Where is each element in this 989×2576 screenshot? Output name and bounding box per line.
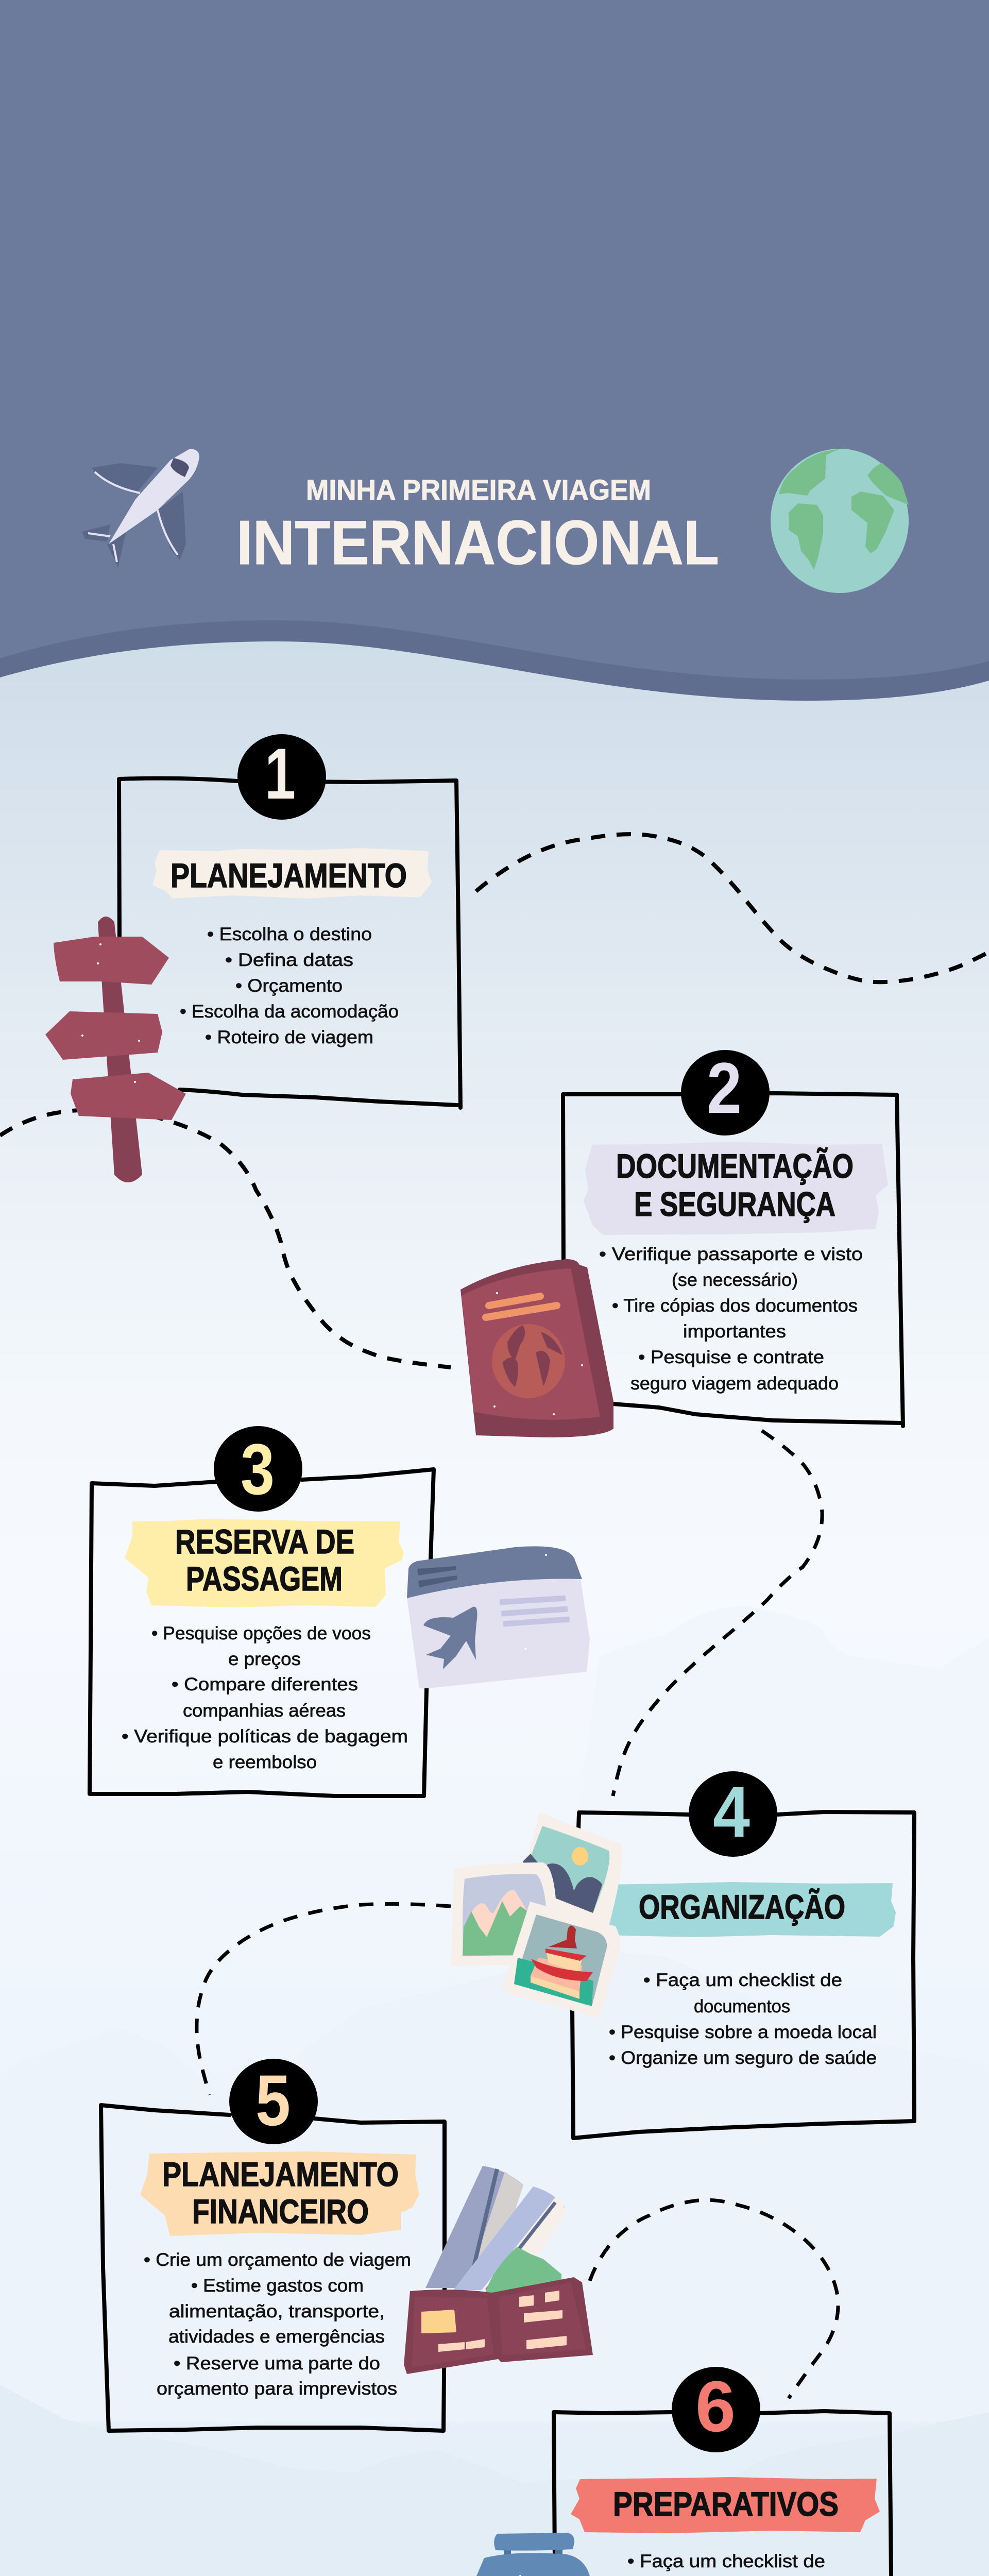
card outline xyxy=(119,778,461,1108)
list: • Tire cópias dos documentos xyxy=(612,1296,858,1316)
icon: airplane xyxy=(82,449,199,568)
card outline xyxy=(101,2105,445,2431)
icon: boarding pass xyxy=(407,1546,590,1688)
panel: step 3 reserva de passagem xyxy=(90,1426,590,1796)
list: e preços xyxy=(228,1649,301,1669)
heading: ORGANIZAÇÃO xyxy=(639,1888,845,1926)
heading highlight xyxy=(584,1142,888,1235)
list xyxy=(599,1244,863,1394)
sky background with mountains xyxy=(0,641,989,2576)
number badge xyxy=(214,1426,302,1512)
list: • Verifique políticas de bagagem xyxy=(122,1726,408,1747)
tickets xyxy=(425,2166,565,2290)
number badge: 2 xyxy=(707,1047,742,1128)
panel: step 4 organizacao xyxy=(451,1771,914,2138)
title: INTERNACIONAL xyxy=(236,507,719,578)
number badge: 3 xyxy=(241,1429,275,1510)
list xyxy=(180,924,399,1047)
panel: step 1 planejamento xyxy=(45,733,461,1182)
heading highlight xyxy=(125,1519,404,1607)
number badge xyxy=(672,2366,760,2452)
wallet xyxy=(404,2277,593,2374)
money xyxy=(486,2247,561,2303)
list: atividades e emergências xyxy=(168,2327,385,2347)
heading: PREPARATIVOS xyxy=(613,2485,839,2523)
list: • Verifique passaporte e visto xyxy=(599,1244,863,1264)
icon: luggage xyxy=(353,2533,607,2576)
list: alimentação, transporte, xyxy=(169,2301,385,2321)
icon: wallet with tickets and money xyxy=(404,2166,593,2374)
back photo xyxy=(515,1812,622,1937)
front photo xyxy=(501,1902,621,2018)
list: • Pesquise sobre a moeda local xyxy=(609,2022,877,2042)
list: orçamento para imprevistos xyxy=(157,2379,397,2399)
heading: PLANEJAMENTO xyxy=(162,2155,399,2193)
title: MINHA PRIMEIRA VIAGEM xyxy=(306,473,651,506)
list: companhias aéreas xyxy=(183,1701,346,1721)
list: • Escolha da acomodação xyxy=(180,1002,399,1022)
heading: PLANEJAMENTO xyxy=(170,856,407,894)
card outline xyxy=(563,1093,903,1426)
dashed route 2 to 4 xyxy=(613,1431,822,1796)
dashed route 4 to 5 xyxy=(197,1904,451,2095)
heading highlight xyxy=(603,1882,896,1937)
list: • Organize um seguro de saúde xyxy=(609,2048,877,2068)
dashed route to passport xyxy=(0,1110,451,1367)
heading: FINANCEIRO xyxy=(192,2192,369,2230)
heading: PASSAGEM xyxy=(186,1560,343,1598)
number badge xyxy=(681,1047,770,1136)
list: • Defina datas xyxy=(225,950,353,970)
list: importantes xyxy=(683,1321,786,1342)
list: • Reserve uma parte do xyxy=(174,2353,380,2374)
heading highlight xyxy=(571,2477,880,2533)
heading highlight xyxy=(140,2151,419,2236)
number badge: 1 xyxy=(265,733,296,814)
list: • Roteiro de viagem xyxy=(205,1027,373,1047)
heading xyxy=(616,1147,854,1223)
heading: DOCUMENTAÇÃO xyxy=(616,1147,854,1185)
list: • Orçamento xyxy=(235,976,343,996)
heading xyxy=(162,2155,399,2230)
number badge: 5 xyxy=(255,2060,291,2141)
title xyxy=(236,473,719,578)
list xyxy=(122,1623,408,1772)
icon: passport xyxy=(461,1259,613,1437)
heading highlight xyxy=(152,848,432,899)
list: • Pesquise opções de voos xyxy=(151,1623,371,1643)
list: • Pesquise e contrate xyxy=(638,1347,824,1367)
list: • Compare diferentes xyxy=(172,1674,358,1694)
number badge xyxy=(237,733,326,820)
wave band xyxy=(0,620,989,773)
heading xyxy=(175,1522,354,1598)
heading: RESERVA DE xyxy=(175,1522,354,1561)
panel: step 5 planejamento financeiro xyxy=(101,2059,593,2431)
card outline xyxy=(572,1812,914,2138)
list: seguro viagem adequado xyxy=(630,1374,839,1394)
list: • Faça um checklist de xyxy=(643,1970,842,1990)
number badge: 4 xyxy=(713,1771,750,1852)
icon: travel photos xyxy=(451,1812,622,2018)
card outline xyxy=(90,1469,434,1796)
icon: signpost xyxy=(45,917,186,1182)
list: • Crie um orçamento de viagem xyxy=(144,2250,411,2270)
panel: step 2 documentacao xyxy=(461,1047,903,1437)
icon: globe xyxy=(771,449,909,593)
list xyxy=(144,2250,411,2399)
panel: step 6 preparativos xyxy=(353,2366,894,2576)
dashed route 5 to 6 xyxy=(590,2200,838,2398)
number badge xyxy=(229,2059,318,2144)
list xyxy=(609,1970,877,2068)
card outline xyxy=(554,2411,894,2576)
number badge xyxy=(689,1771,777,1857)
heading: E SEGURANÇA xyxy=(634,1185,835,1223)
list: e reembolso xyxy=(213,1752,317,1772)
number badge: 6 xyxy=(695,2366,736,2447)
header background xyxy=(0,0,989,721)
dashed route 1 to 2 xyxy=(476,834,989,982)
list: documentos xyxy=(694,1996,790,2016)
list: (se necessário) xyxy=(672,1270,798,1290)
list: • Escolha o destino xyxy=(207,924,372,944)
list: • Estime gastos com xyxy=(191,2276,364,2296)
blue suitcase xyxy=(458,2533,607,2576)
left photo xyxy=(451,1862,556,1966)
list: • Faça um checklist de xyxy=(627,2551,825,2571)
